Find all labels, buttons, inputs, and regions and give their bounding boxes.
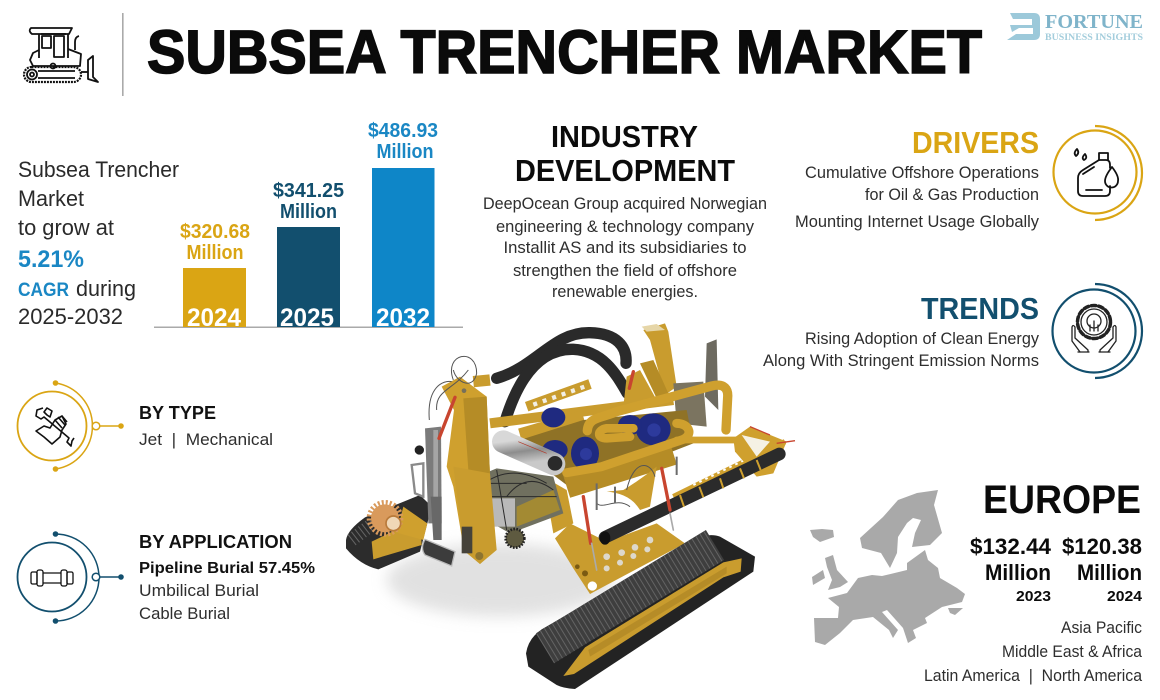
driver text: for Oil & Gas Production <box>865 186 1039 204</box>
icon: pipe <box>18 531 124 624</box>
upper frame and tower <box>473 323 718 533</box>
logo: Fortune Business Insights: BUSINESS INSIGHTS <box>1045 33 1143 43</box>
panel: by application <box>18 531 315 624</box>
by application text <box>139 532 315 623</box>
heading: industry development <box>515 119 735 188</box>
heading: industry development: INDUSTRY <box>551 119 698 154</box>
icon: wrench in hand <box>18 380 124 472</box>
front track <box>526 535 755 689</box>
panel: trends <box>763 284 1142 378</box>
bar: 2025: 2025 <box>280 304 334 332</box>
other regions: Asia Pacific <box>1061 619 1142 637</box>
driver text <box>795 164 1040 231</box>
title: SUBSEA TRENCHER MARKET <box>147 18 982 86</box>
text block: market growth <box>18 157 179 329</box>
value 2024: Million <box>1077 560 1142 585</box>
map: Europe <box>810 490 965 645</box>
text block: industry development: Installit AS and its subsidiaries to <box>504 239 746 257</box>
by application text: Cable Burial <box>139 605 230 623</box>
chrome cylinder <box>503 442 562 471</box>
bar: 2024: 2024 <box>187 304 241 332</box>
panel: Europe values: EUROPE <box>983 478 1141 522</box>
bar chart <box>154 120 463 332</box>
by type text: BY TYPE <box>139 403 216 423</box>
trend text: Rising Adoption of Clean Energy <box>805 330 1040 348</box>
blue pumps <box>541 407 671 470</box>
red rams <box>439 372 673 570</box>
mechanical bay <box>477 468 563 548</box>
bar: 2032: 2032 <box>376 304 430 332</box>
by application text: Pipeline Burial 57.45% <box>139 560 315 577</box>
other regions <box>924 619 1143 685</box>
text block: industry development: engineering & technology company <box>496 218 755 236</box>
panel: Europe values <box>924 478 1143 685</box>
text block: market growth: during <box>76 276 136 301</box>
text block: industry development: strengthen the field of offshore <box>513 262 737 280</box>
driver text: Cumulative Offshore Operations <box>805 164 1039 182</box>
panel: trends: TRENDS <box>921 291 1039 326</box>
text block: market growth: CAGR <box>18 280 69 301</box>
text block: market growth: Subsea Trencher <box>18 157 179 182</box>
logo: Fortune Business Insights <box>1007 11 1143 43</box>
value 2024: 2024 <box>1107 588 1143 605</box>
grey ram and foot <box>412 427 455 566</box>
other regions: Latin America | North America <box>924 667 1143 685</box>
by application text: Umbilical Burial <box>139 582 259 600</box>
by application text: BY APPLICATION <box>139 532 292 552</box>
text block: market growth: to grow at <box>18 215 114 240</box>
value 2024: $120.38 <box>1062 534 1142 559</box>
black hoses <box>497 333 627 422</box>
text block: industry development <box>483 195 767 301</box>
trend text <box>763 330 1040 370</box>
front column <box>442 377 497 564</box>
value 2023: $132.44 <box>970 534 1052 559</box>
bar: 2024: $320.68 <box>180 221 250 243</box>
trend text: Along With Stringent Emission Norms <box>763 352 1039 370</box>
bar: 2032 <box>368 120 438 332</box>
value 2023: 2023 <box>1016 588 1051 605</box>
icon: hands with gear <box>1052 284 1142 378</box>
right arm <box>600 427 795 545</box>
by type text <box>139 403 273 449</box>
by type text: Jet | Mechanical <box>139 431 273 449</box>
value 2023 <box>970 534 1052 605</box>
bar: 2025: Million <box>280 201 337 223</box>
bar: 2024: Million <box>186 242 244 264</box>
heading: industry development: DEVELOPMENT <box>515 153 735 188</box>
panel: drivers: DRIVERS <box>912 125 1039 160</box>
text block: market growth: Market <box>18 186 84 211</box>
cutter wheel <box>369 502 427 540</box>
yellow pipes <box>567 385 737 473</box>
icon: bulldozer <box>24 28 98 82</box>
logo: Fortune Business Insights: FORTUNE <box>1045 11 1143 33</box>
text block: industry development: renewable energies. <box>552 283 698 301</box>
bar: 2025: $341.25 <box>273 180 344 202</box>
bar: 2032: Million <box>376 141 434 163</box>
icon: oil canister <box>1054 126 1142 220</box>
rear track <box>346 495 432 569</box>
trencher machine illustration <box>346 323 795 689</box>
wires <box>429 356 677 510</box>
panel: by type <box>18 380 273 472</box>
value 2024 <box>1062 534 1143 605</box>
text block: industry development: DeepOcean Group acquired Norwegian <box>483 195 767 213</box>
driver text: Mounting Internet Usage Globally <box>795 213 1040 231</box>
other regions: Middle East & Africa <box>1002 643 1143 661</box>
bar: 2024 <box>180 221 250 332</box>
bar: 2025 <box>273 180 344 332</box>
text block: market growth: 2025-2032 <box>18 304 123 329</box>
bar: 2032: $486.93 <box>368 120 438 142</box>
panel: drivers <box>795 125 1142 231</box>
value 2023: Million <box>985 560 1051 585</box>
lower chassis legs <box>555 523 685 594</box>
text block: market growth: 5.21% <box>18 246 84 273</box>
